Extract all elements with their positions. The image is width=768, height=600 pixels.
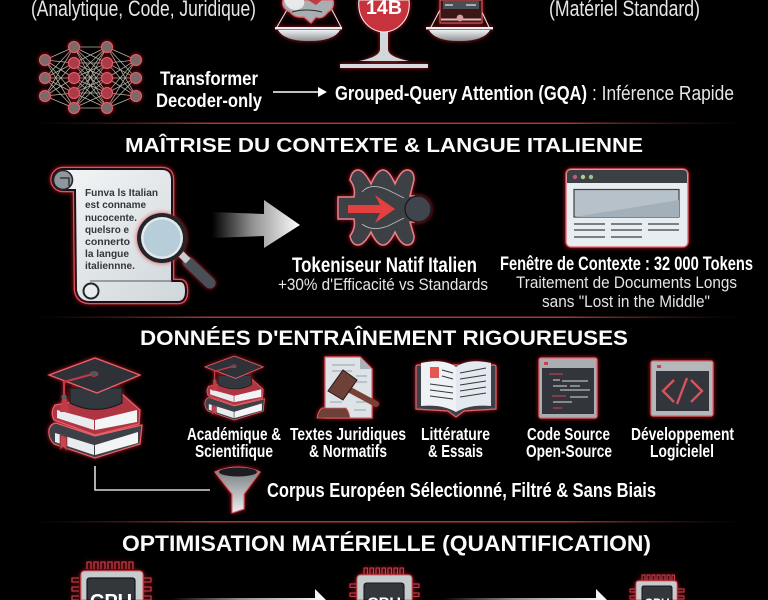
heading: données d'entraînement: DONNÉES D'ENTRAÎNEMENT RIGOUREUSES [140,326,628,350]
icon: large cap and books [49,358,142,458]
right pan with server [426,0,493,41]
icon: developer window [651,361,713,416]
scroll text: italiennne. [85,260,135,272]
magnifier [137,213,210,283]
labels: data sources: & Normatifs [309,441,387,461]
labels: data sources: Scientifique [195,441,273,461]
icon: context window [566,169,688,247]
arrow: scroll to tokenizer [212,200,300,248]
icon: tokenizer [338,170,431,245]
labels: data sources: Open-Source [526,441,612,461]
labels: data sources: & Essais [428,441,483,461]
label: transformer decoder-only [156,69,262,112]
labels: data sources: Littérature [421,424,490,444]
icon: cpu small [630,575,684,600]
label: tokeniseur: +30% d'Efficacité vs Standards [278,275,488,294]
icon: small cap and books [205,356,264,420]
label: tokeniseur [278,254,488,294]
icon: cpu medium [350,568,419,600]
arrow: cpu large to medium [170,589,326,600]
label: fenêtre de contexte: Traitement de Documents Longs [516,273,737,292]
arrow: to GQA [273,87,327,97]
label: fenêtre de contexte [500,253,753,311]
scroll text: nucocente. [85,212,137,224]
scroll text: quelsro e [85,224,129,236]
left pan with brain [275,0,342,41]
label: transformer decoder-only: Decoder-only [156,91,262,112]
labels: data sources: Académique & [187,424,281,444]
label: transformer decoder-only: Transformer [160,69,259,90]
scroll text [85,187,158,272]
icon: gavel document [317,357,376,418]
icon: cpu large [72,562,151,600]
label: grouped-query attention: : Inférence Rapide [592,83,734,105]
labels: data sources: Textes Juridiques [290,424,406,444]
labels: data sources [187,424,734,461]
scroll text: la langue [85,248,129,260]
label: fenêtre de contexte: sans "Lost in the Middle" [542,292,710,311]
icon: scroll with magnifier [52,169,210,302]
scroll text: est conname [85,199,146,211]
labels: data sources: Logicielel [650,441,714,461]
scroll text: Funva ls Italian [85,187,158,199]
labels: data sources: Code Source [527,424,610,444]
icon: open book [416,361,496,417]
icon: neural network [40,42,142,114]
label: corpus: Corpus Européen Sélectionné, Filtré & Sans Biais [267,480,656,502]
arrow: cpu medium to small [441,589,607,600]
label: tokeniseur: Tokeniseur Natif Italien [292,254,477,277]
heading: maîtrise du contexte: MAÎTRISE DU CONTEXTE & LANGUE ITALIENNE [125,133,643,157]
connector: books to funnel [95,466,210,490]
scroll paper [52,169,186,302]
center pillar with 14B badge [340,0,428,68]
scroll text: connerto [85,236,130,248]
labels: data sources: Développement [631,424,734,444]
icon: balance scale [275,0,493,68]
heading: optimisation matérielle: OPTIMISATION MATÉRIELLE (QUANTIFICATION) [122,531,651,556]
icon: funnel [215,467,260,513]
icon: code window [539,358,597,418]
label: grouped-query attention: Grouped-Query Attention (GQA) [335,83,587,105]
